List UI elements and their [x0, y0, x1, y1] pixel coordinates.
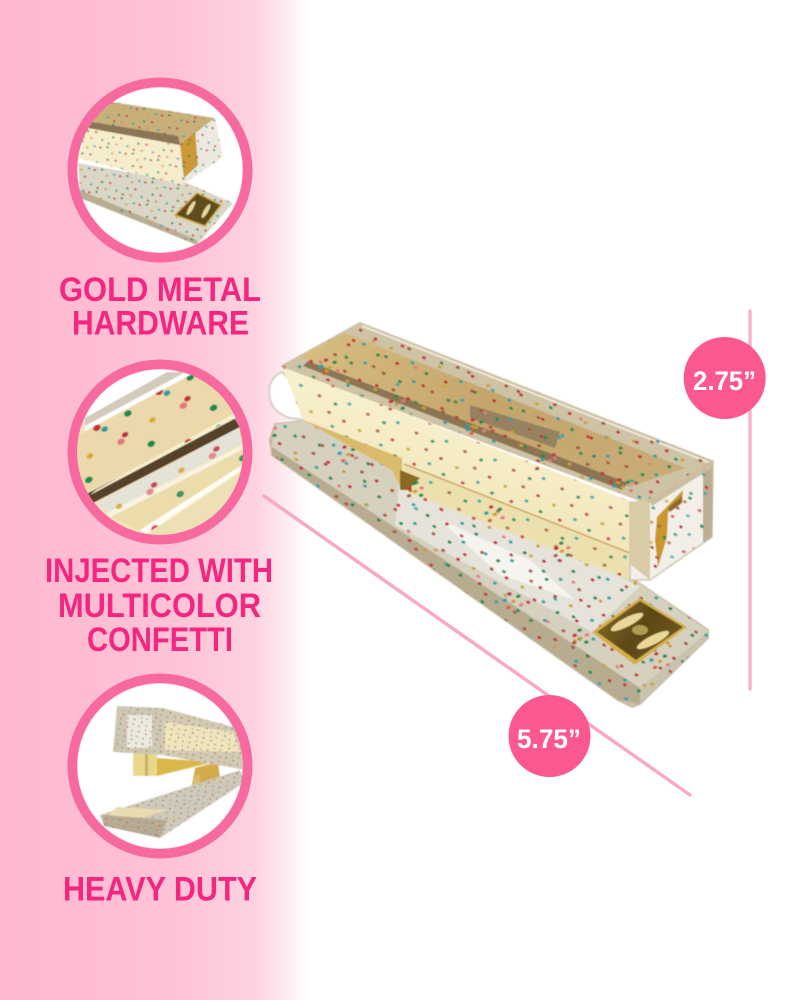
badge: height 2.75 inches: 2.75” [693, 366, 756, 396]
label: injected with multicolor confetti [45, 552, 273, 659]
feature: gold metal hardware [59, 78, 261, 342]
label: injected with multicolor confetti: CONFETTI [87, 621, 233, 659]
circle photo: confetti close-up [68, 360, 255, 560]
stapler base [270, 421, 708, 707]
horizontal length dimension line [264, 496, 690, 795]
stapler arm front face [282, 366, 630, 580]
main stapler product illustration [269, 323, 713, 707]
label: gold metal hardware [59, 271, 261, 342]
white staple pusher tab [269, 372, 304, 420]
pink gradient side panel [0, 0, 310, 1000]
vertical height dimension line [748, 311, 752, 689]
label: gold metal hardware: GOLD METAL [59, 271, 261, 309]
circle photo: side view of open stapler [68, 674, 252, 858]
label: injected with multicolor confetti: MULTICOLOR [58, 587, 261, 625]
badge: length 5.75 inches: 5.75” [517, 724, 581, 754]
feature: injected with multicolor confetti [45, 360, 273, 659]
label: gold metal hardware: HARDWARE [72, 304, 249, 342]
feature: heavy duty [63, 674, 257, 908]
stapler arm end face [630, 461, 713, 580]
gold anvil plate [592, 598, 687, 665]
circle photo: gold hardware detail [68, 78, 252, 262]
stapler arm top face [282, 323, 712, 502]
label: heavy duty: HEAVY DUTY [63, 870, 257, 908]
label: injected with multicolor confetti: INJECTED WITH [45, 552, 273, 590]
badge: length 5.75 inches [508, 695, 590, 777]
badge: height 2.75 inches [684, 337, 766, 419]
